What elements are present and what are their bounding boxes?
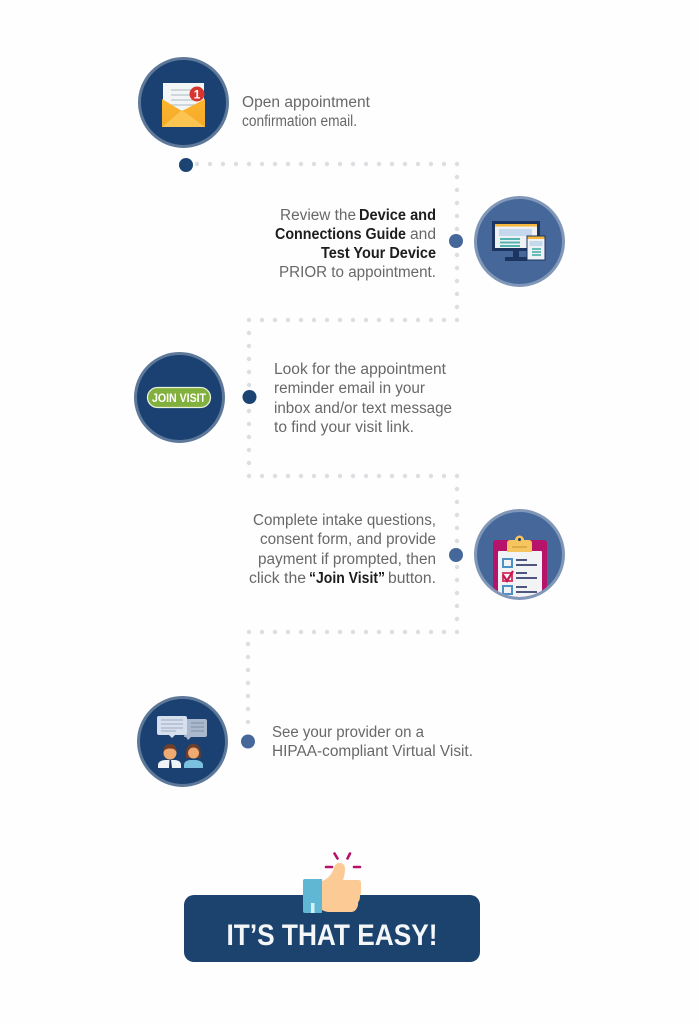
text: step 2: PRIOR to appointment. bbox=[279, 264, 436, 281]
marker dot 4 bbox=[449, 548, 463, 562]
step 5: see provider bbox=[138, 698, 473, 786]
icon: envelope in circle: 1 bbox=[194, 88, 201, 102]
text: step 2 bbox=[275, 207, 436, 281]
step 1: open email bbox=[140, 58, 371, 172]
text: step 1 bbox=[242, 94, 371, 130]
step 4: intake questions bbox=[249, 510, 564, 610]
text: step 3: to find your visit link. bbox=[274, 419, 414, 436]
icon: thumbs up bbox=[303, 854, 361, 913]
text: step 2: Device and bbox=[359, 207, 436, 224]
icon: monitor and tablet in circle bbox=[476, 198, 564, 286]
infographic: virtual visit steps bbox=[134, 57, 565, 962]
text: step 2: Review the bbox=[280, 207, 356, 224]
text: step 5 bbox=[272, 724, 473, 760]
step 3: find visit link bbox=[136, 354, 452, 442]
step 2: test device bbox=[275, 198, 564, 286]
marker dot 3 bbox=[242, 390, 256, 404]
text: step 3: reminder email in your bbox=[274, 380, 425, 397]
call to action banner bbox=[184, 854, 480, 962]
icon: join visit button in circle bbox=[136, 354, 224, 442]
text: step 4: Complete intake questions, bbox=[253, 512, 436, 529]
icon: envelope in circle bbox=[140, 58, 228, 146]
icon: clipboard in circle bbox=[476, 510, 564, 610]
text: step 4: “Join Visit” bbox=[309, 570, 385, 587]
text: step 4 bbox=[249, 512, 436, 587]
text: step 5: See your provider on a bbox=[272, 724, 424, 741]
text: step 1: Open appointment bbox=[242, 94, 371, 111]
text: step 2: Connections Guide bbox=[275, 226, 406, 243]
text: step 4: click the bbox=[249, 570, 306, 587]
text: step 4: payment if prompted, then bbox=[258, 551, 436, 568]
text: step 2: and bbox=[410, 226, 436, 243]
banner background bbox=[184, 895, 480, 962]
icon: provider and patient conversation in circle bbox=[138, 698, 226, 786]
text: step 5: HIPAA-compliant Virtual Visit. bbox=[272, 743, 473, 760]
marker dot 5 bbox=[241, 734, 255, 748]
text: step 3 bbox=[274, 361, 452, 436]
text: step 3: Look for the appointment bbox=[274, 361, 447, 378]
banner text: IT’S THAT EASY! bbox=[226, 919, 438, 952]
text: step 3: inbox and/or text message bbox=[274, 400, 452, 417]
text: step 2: Test Your Device bbox=[321, 245, 436, 262]
marker dot 1 bbox=[179, 158, 193, 172]
marker dot 2 bbox=[449, 234, 463, 248]
text: step 4: button. bbox=[388, 570, 436, 587]
text: step 1: confirmation email. bbox=[242, 113, 357, 130]
icon: join visit button in circle: JOIN VISIT bbox=[152, 393, 206, 405]
text: step 4: consent form, and provide bbox=[260, 531, 436, 548]
